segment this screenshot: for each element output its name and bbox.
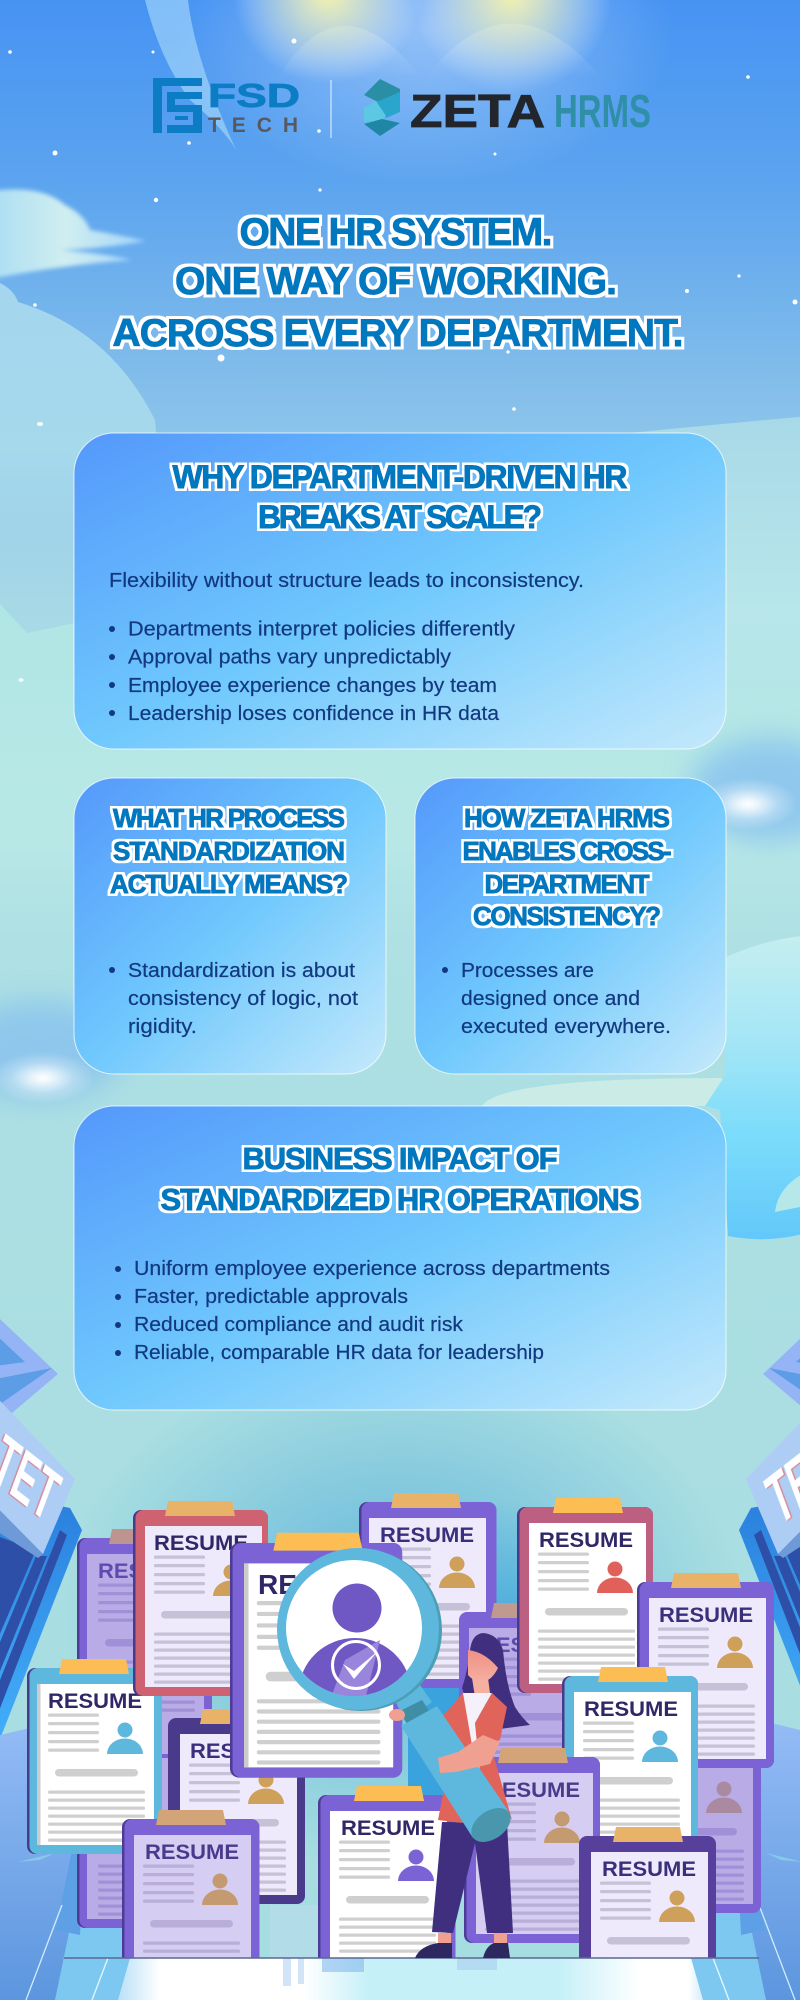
floor line [64, 1957, 759, 1959]
bullet list: Uniform employee experience across departments [134, 1258, 610, 1280]
logo: FSD Tech [153, 77, 300, 137]
resume card: purple lower right: RESUME [486, 1778, 580, 1802]
person in lens [302, 1584, 406, 1696]
resume card: red right [517, 1498, 653, 1693]
blue gap behind cards [408, 1522, 517, 1795]
handle end [465, 1801, 517, 1849]
heading: HOW ZETA HRMS [464, 803, 670, 833]
bullet list: Employee experience changes by team [128, 675, 497, 697]
heading: BUSINESS IMPACT OF [242, 1141, 558, 1176]
bullet list: Leadership loses confidence in HR data [128, 703, 500, 725]
background clouds and mounds [0, 283, 800, 1870]
logo: Zeta HRMS: ZETA [410, 85, 545, 137]
resume card: red left [133, 1501, 268, 1696]
heading: WHY DEPARTMENT-DRIVEN HR [172, 459, 628, 495]
check badge [332, 1642, 380, 1688]
handle [401, 1706, 509, 1838]
cardigan right [475, 1693, 512, 1820]
heading [462, 803, 672, 931]
bullet text: rigidity. [128, 1016, 197, 1038]
woman figure [415, 1633, 530, 1958]
resume card: large [230, 1533, 402, 1778]
bullet text: Standardization is about [128, 960, 355, 982]
intro text: Flexibility without structure leads to inconsistency. [109, 570, 584, 592]
neck [395, 1685, 432, 1722]
resume card: large: RESUME [258, 1569, 378, 1600]
resume card: purple right: RESUME [659, 1603, 753, 1627]
cardigan left [438, 1693, 478, 1823]
heading [110, 803, 348, 899]
trousers [432, 1822, 513, 1933]
icon: Zeta mark [364, 79, 400, 136]
resume card: purple right [637, 1573, 774, 1768]
heading: BREAKS AT SCALE? [258, 499, 542, 535]
magnifying glass [277, 1548, 517, 1849]
flare: right [698, 778, 798, 830]
resume card: lower left [122, 1810, 260, 1958]
panel: how Zeta HRMS enables consistency [415, 778, 726, 1074]
bullet text: Processes are [461, 960, 594, 982]
shirt [463, 1693, 492, 1773]
resume card: purple lower right [464, 1748, 600, 1943]
title: ONE WAY OF WORKING. [175, 260, 617, 303]
logo: FSD Tech: TECH [208, 114, 298, 137]
heading: ACTUALLY MEANS? [110, 869, 348, 899]
bullet list: Departments interpret policies differently [128, 618, 515, 640]
resume card: lower left: RESUME [145, 1840, 239, 1864]
shoes [415, 1943, 510, 1958]
hand at neck [389, 1709, 405, 1721]
bullet list: Approval paths vary unpredictably [128, 646, 451, 668]
resume cards [27, 1493, 774, 2000]
resume card: back left: RESUME [98, 1559, 192, 1583]
resume card: teal right [562, 1667, 698, 1836]
flare: left [0, 1052, 95, 1104]
lens [286, 1560, 422, 1696]
logo divider [330, 80, 332, 138]
collar [400, 1700, 430, 1724]
heading [172, 459, 628, 535]
resume card: red left: RESUME [154, 1531, 248, 1555]
bullet list [109, 618, 515, 725]
bullet text: executed everywhere. [461, 1016, 671, 1038]
resume card: back left [77, 1529, 212, 1754]
bullet list: Reduced compliance and audit risk [134, 1314, 464, 1336]
logo: Zeta HRMS: HRMS [554, 85, 651, 137]
bullet list: Faster, predictable approvals [134, 1286, 408, 1308]
bullet text: consistency of logic, not [128, 988, 358, 1010]
resume card: dark middle: RESUME [190, 1739, 284, 1763]
left cloud [0, 189, 146, 280]
logo: Zeta HRMS [364, 79, 651, 137]
bullet text [109, 960, 358, 1038]
logo: FSD Tech: FSD [208, 77, 300, 114]
resume card: dark lower right: RESUME [602, 1857, 696, 1881]
sunlight glow [175, 0, 675, 185]
resume card: top middle: RESUME [380, 1523, 474, 1547]
ankles [438, 1933, 507, 1944]
face [468, 1650, 498, 1682]
building: right [691, 1300, 800, 2000]
resume card: behind middle right [459, 1603, 562, 1757]
resume card: red right: RESUME [539, 1528, 633, 1552]
resume card: dark lower right [579, 1827, 716, 1958]
resume card: back right [698, 1768, 761, 1913]
bullet list [115, 1258, 610, 1364]
ring [280, 1549, 442, 1711]
resume card: lower centre: RESUME [341, 1816, 435, 1840]
heading [160, 1141, 640, 1217]
title: ACROSS EVERY DEPARTMENT. [112, 312, 684, 355]
heading: STANDARDIZATION [113, 836, 345, 866]
bullet text: designed once and [461, 988, 640, 1010]
resume card: dark middle [168, 1709, 305, 1904]
light stripes near floor [270, 1905, 497, 1986]
title [112, 211, 684, 355]
panel: why department-driven HR breaks [74, 433, 726, 749]
light streak [145, 0, 236, 150]
icon: FSD mark [153, 78, 202, 133]
resume card: top middle [359, 1493, 496, 1688]
panel: what standardization means [74, 778, 386, 1074]
resume card: teal right: RESUME [584, 1697, 678, 1721]
title: ONE HR SYSTEM. [240, 211, 552, 254]
resume card: teal left: RESUME [48, 1689, 142, 1713]
resume card: back left lower [77, 1754, 168, 1928]
neck [472, 1678, 490, 1697]
heading: WHAT HR PROCESS [113, 803, 345, 833]
bullet text [442, 960, 671, 1038]
resume card: behind middle right: RESUME [480, 1633, 574, 1657]
heading: ENABLES CROSS- [462, 836, 672, 866]
arm over handle [438, 1735, 500, 1773]
stars [8, 38, 797, 682]
hair [462, 1633, 530, 1729]
floor glow [0, 1958, 800, 2000]
building: left [0, 1300, 130, 2000]
bullet list: Reliable, comparable HR data for leadership [134, 1342, 544, 1364]
panel: business impact [74, 1106, 726, 1410]
heading: DEPARTMENT [484, 869, 650, 899]
heading: STANDARDIZED HR OPERATIONS [160, 1182, 640, 1217]
resume card: lower centre [318, 1786, 456, 1958]
resume card: teal left [27, 1659, 162, 1854]
heading: CONSISTENCY? [473, 901, 661, 931]
